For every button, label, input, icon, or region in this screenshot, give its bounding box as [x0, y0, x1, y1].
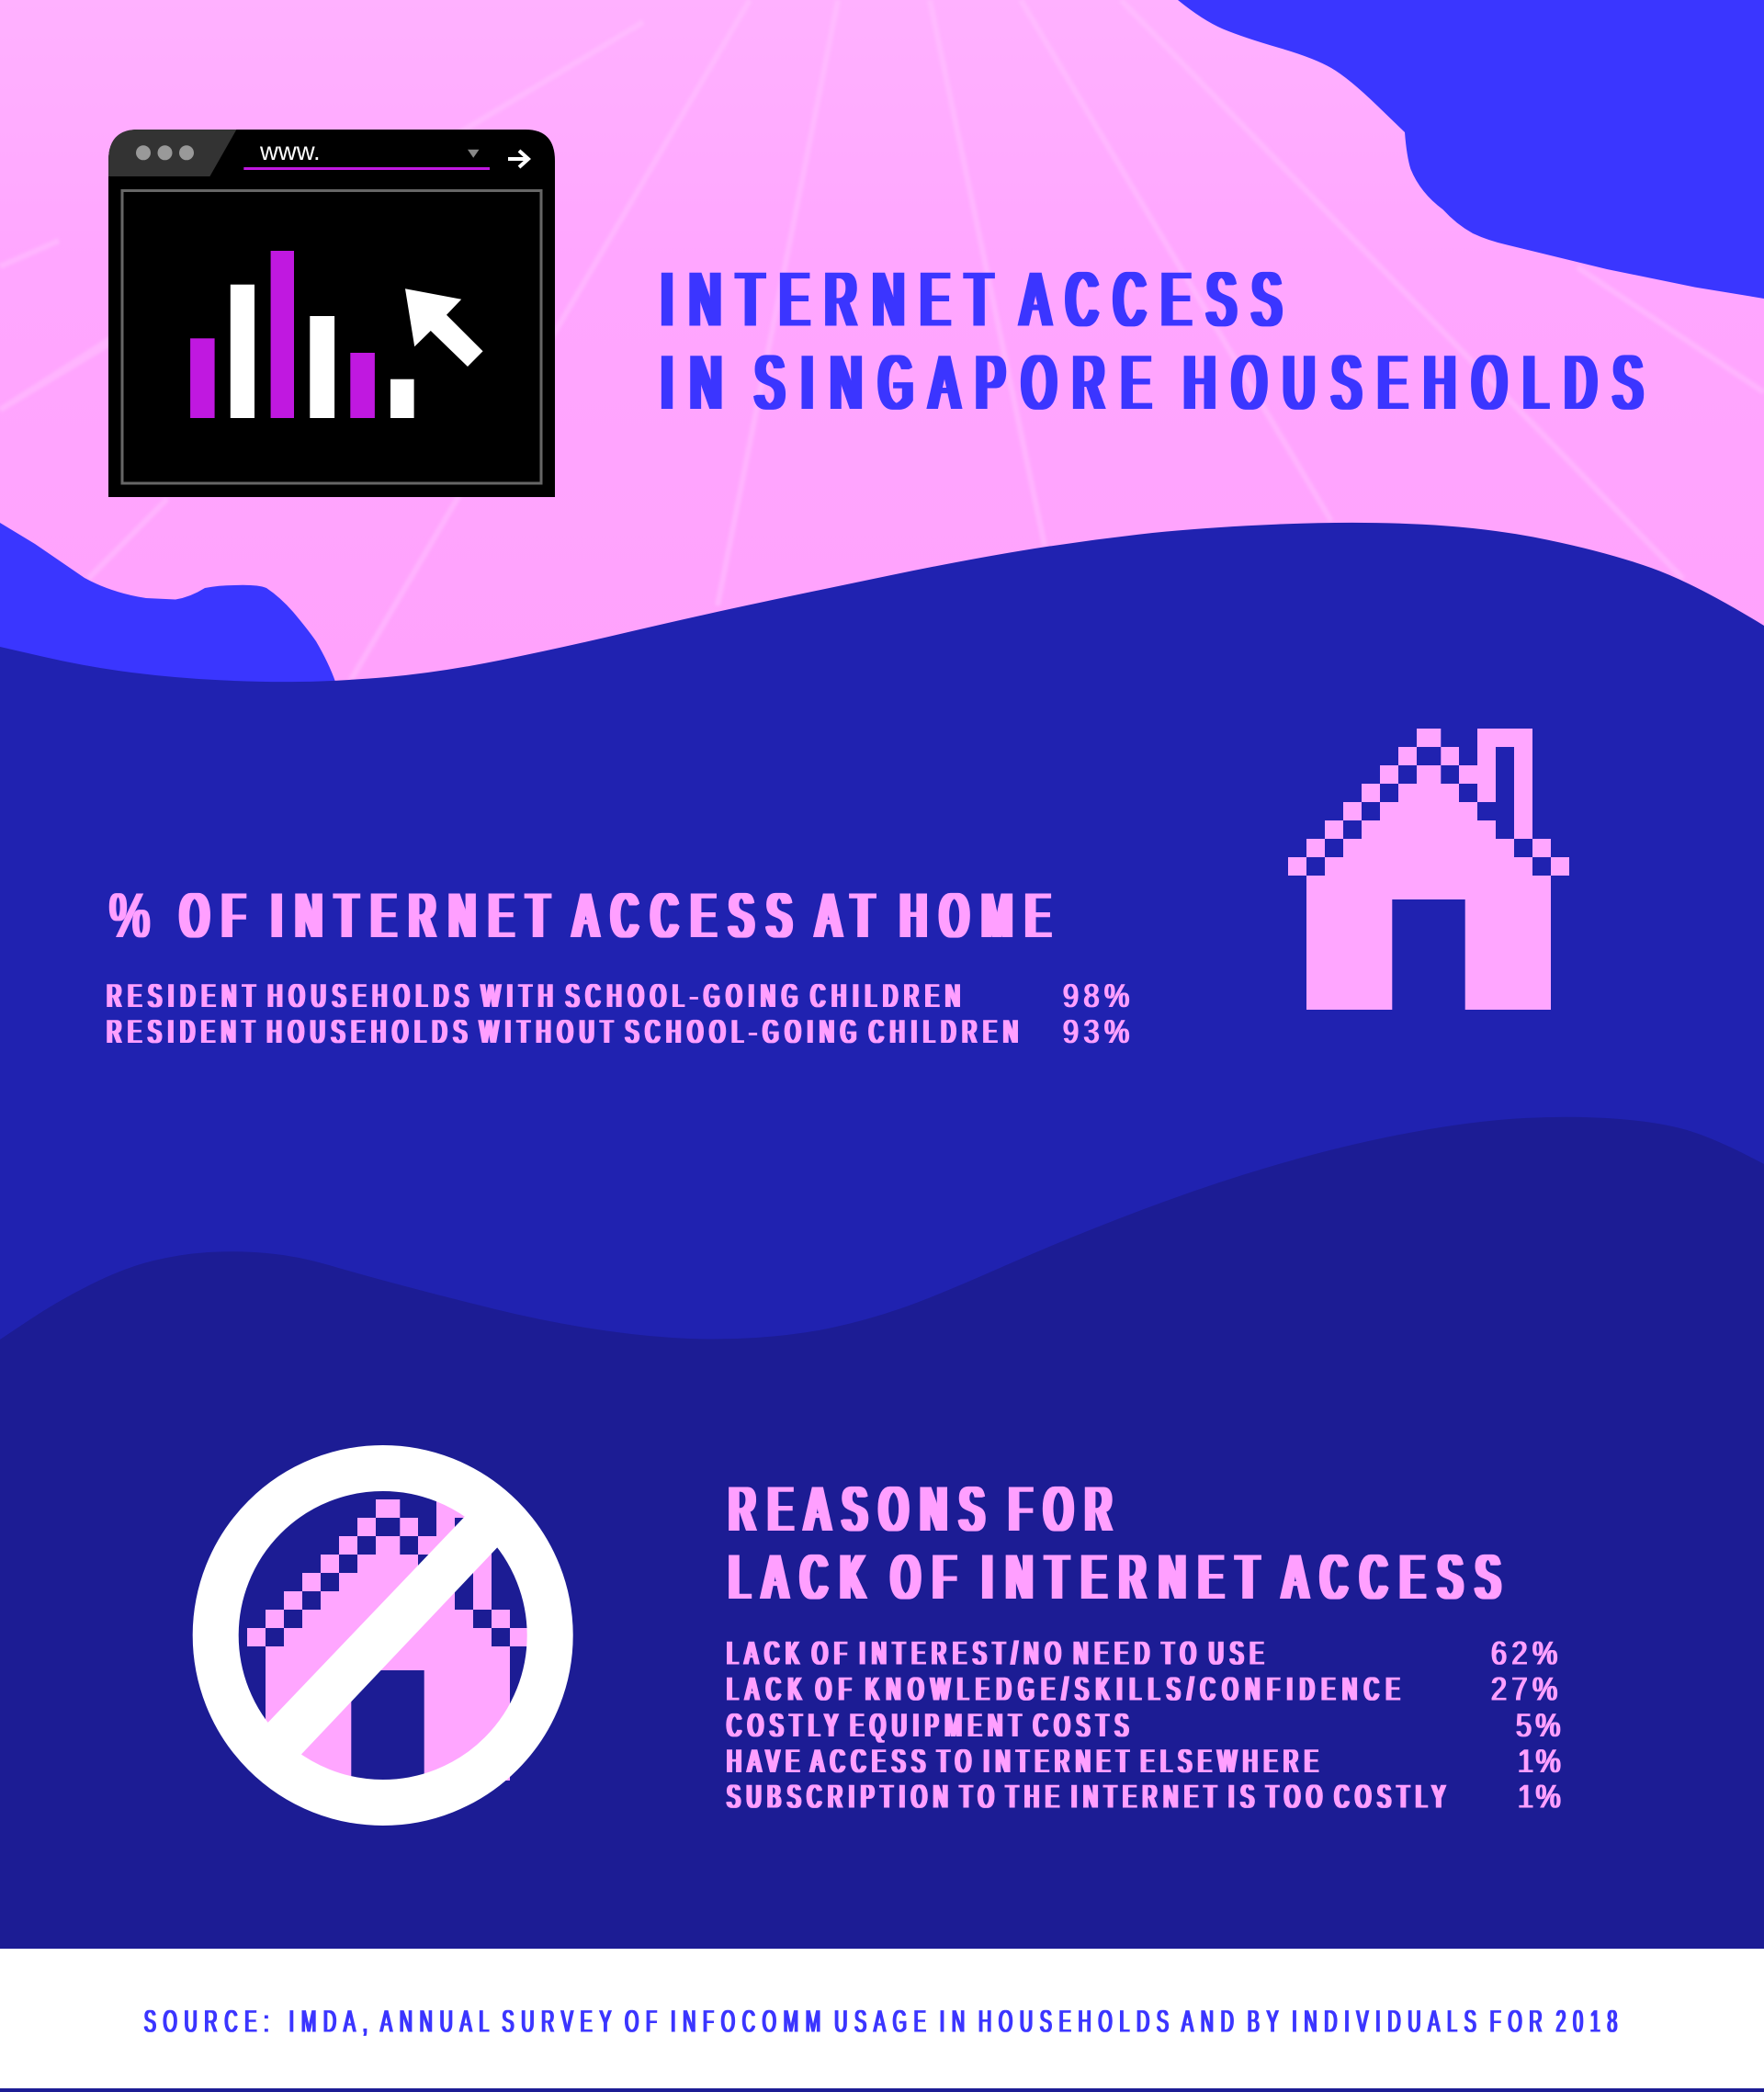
bar chart [190, 251, 414, 418]
text block: reasons rows: 1% [1518, 1778, 1561, 1815]
text block: home access rows: RESIDENT HOUSEHOLDS WITH SCHOOL-GOING CHILDREN [107, 977, 960, 1014]
text block: reasons rows: SUBSCRIPTION TO THE INTERNET IS TOO COSTLY [727, 1778, 1445, 1815]
shape: bottom left blue blob [0, 523, 335, 698]
title: IN SINGAPORE HOUSEHOLDS [662, 339, 1642, 425]
icon: crossed out house [216, 1468, 550, 1803]
text block: home access rows: 98% [1063, 977, 1129, 1014]
text block: reasons rows: 27% [1491, 1670, 1557, 1708]
shape: dark navy band [0, 1117, 1764, 2092]
text block: reasons rows [727, 1634, 1561, 1815]
icon: pixel house [1288, 729, 1569, 1010]
panel: internet access at home [107, 880, 1129, 1050]
text block: reasons rows: HAVE ACCESS TO INTERNET ELSEWHERE [727, 1742, 1317, 1780]
panel: sky background [0, 0, 1764, 698]
icon: cursor arrow [405, 288, 483, 367]
panel: source footer [0, 1949, 1764, 2092]
text block: home access rows: 93% [1063, 1012, 1129, 1050]
text block: reasons rows: LACK OF KNOWLEDGE/SKILLS/CONFIDENCE [727, 1670, 1399, 1708]
text block: reasons rows: LACK OF INTEREST/NO NEED TO USE [727, 1634, 1263, 1672]
text block: reasons rows: 1% [1518, 1742, 1561, 1780]
title [662, 255, 1642, 425]
text block: home access rows [107, 977, 1129, 1050]
icon: go arrow [508, 151, 528, 167]
heading: reasons: LACK OF INTERNET ACCESS [729, 1542, 1499, 1612]
shape: top right blue blob [1178, 0, 1764, 299]
text block: reasons rows: COSTLY EQUIPMENT COSTS [727, 1706, 1128, 1744]
title: INTERNET ACCESS [662, 255, 1281, 342]
heading: reasons [729, 1474, 1499, 1612]
text block: home access rows: RESIDENT HOUSEHOLDS WITHOUT SCHOOL-GOING CHILDREN [107, 1012, 1018, 1050]
source text: SOURCE: IMDA, ANNUAL SURVEY OF INFOCOMM USAGE IN HOUSEHOLDS AND BY INDIVIDUALS FOR 2018 [144, 2005, 1617, 2040]
shape: middle blue band [0, 523, 1764, 2092]
address text: www. [259, 137, 321, 165]
heading: reasons: REASONS FOR [729, 1474, 1112, 1544]
heading: percent at home: % [109, 880, 150, 951]
text block: reasons rows: 5% [1516, 1706, 1560, 1744]
panel: reasons for lack of access [216, 1468, 1561, 1815]
heading: percent at home: OF INTERNET ACCESS AT HOME [181, 880, 1050, 951]
icon: browser window with chart [108, 130, 555, 497]
text block: reasons rows: 62% [1491, 1634, 1557, 1672]
